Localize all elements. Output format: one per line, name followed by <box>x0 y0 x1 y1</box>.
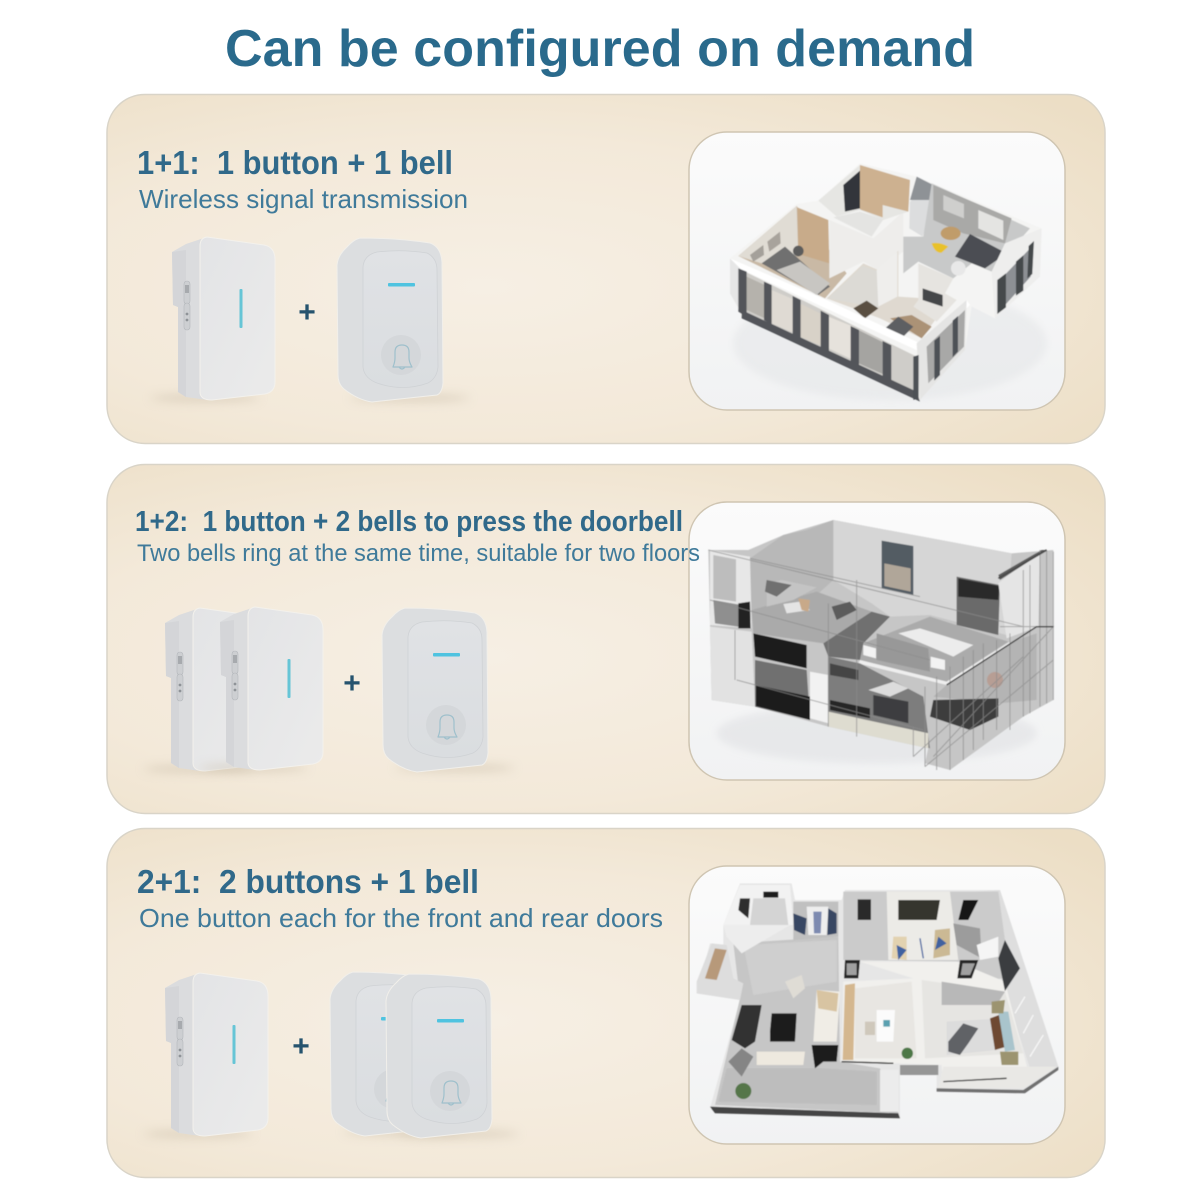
upper walls <box>833 520 1012 635</box>
bedroom <box>738 206 847 298</box>
center kitchen room <box>842 962 1030 1085</box>
bedroom <box>922 980 1023 1058</box>
device: two doorbell buttons <box>330 972 519 1138</box>
device: plug-in bell receiver <box>150 237 275 402</box>
device: doorbell button <box>382 608 515 772</box>
panel background <box>107 464 1105 814</box>
front wall with windows <box>730 258 970 352</box>
device: plug-in bell receiver <box>143 973 268 1138</box>
lower terraces <box>938 1067 1057 1088</box>
panel background <box>107 94 1105 444</box>
plus sign: + <box>343 667 361 700</box>
middle rooms <box>827 251 950 338</box>
plus sign: + <box>292 1030 310 1063</box>
heading: 2+1: 2+1: 2 buttons + 1 bell <box>137 863 479 900</box>
image: one-floor apartment cutaway <box>689 132 1065 410</box>
outline <box>697 883 1058 1118</box>
image: two-floor cutaway <box>689 502 1065 780</box>
walls outer <box>730 163 1042 400</box>
living floor <box>715 937 898 1113</box>
panel: 1+1 configuration <box>107 94 1105 444</box>
kitchen block <box>723 885 793 925</box>
subheading: front and rear doors: One button each for the front and rear doors <box>139 903 663 933</box>
mezzanine floor <box>860 617 1008 682</box>
living furniture <box>732 1005 762 1048</box>
heading: 1+1: 1+1: 1 button + 1 bell <box>137 144 453 181</box>
living room <box>903 183 1030 278</box>
balcony planter <box>697 943 743 1000</box>
device: two plug-in bell receivers <box>143 607 323 773</box>
building base <box>708 520 1053 770</box>
panel: 1+2 configuration <box>107 464 1105 814</box>
plus sign: + <box>298 296 316 329</box>
lower floor <box>755 660 810 720</box>
title: Can be configured on demand <box>225 20 975 78</box>
panel: 2+1 configuration <box>107 828 1105 1178</box>
subheading: two bells: Two bells ring at the same time, suitable for two floors <box>137 540 700 567</box>
subheading: wireless signal: Wireless signal transmission <box>139 184 468 214</box>
wireframe structure lines <box>708 550 1053 770</box>
kitchen <box>818 165 910 220</box>
top middle rooms <box>843 892 1005 982</box>
right outer wall panels <box>977 890 1058 1078</box>
left column <box>710 550 752 628</box>
image: large flat floor plan <box>689 866 1065 1144</box>
dining table <box>793 902 838 940</box>
upper floor <box>752 592 872 643</box>
heading: 1+2: 1+2: 1 button + 2 bells to press the doorbell <box>135 506 683 538</box>
panel background <box>107 828 1105 1178</box>
device: doorbell button <box>337 238 470 402</box>
